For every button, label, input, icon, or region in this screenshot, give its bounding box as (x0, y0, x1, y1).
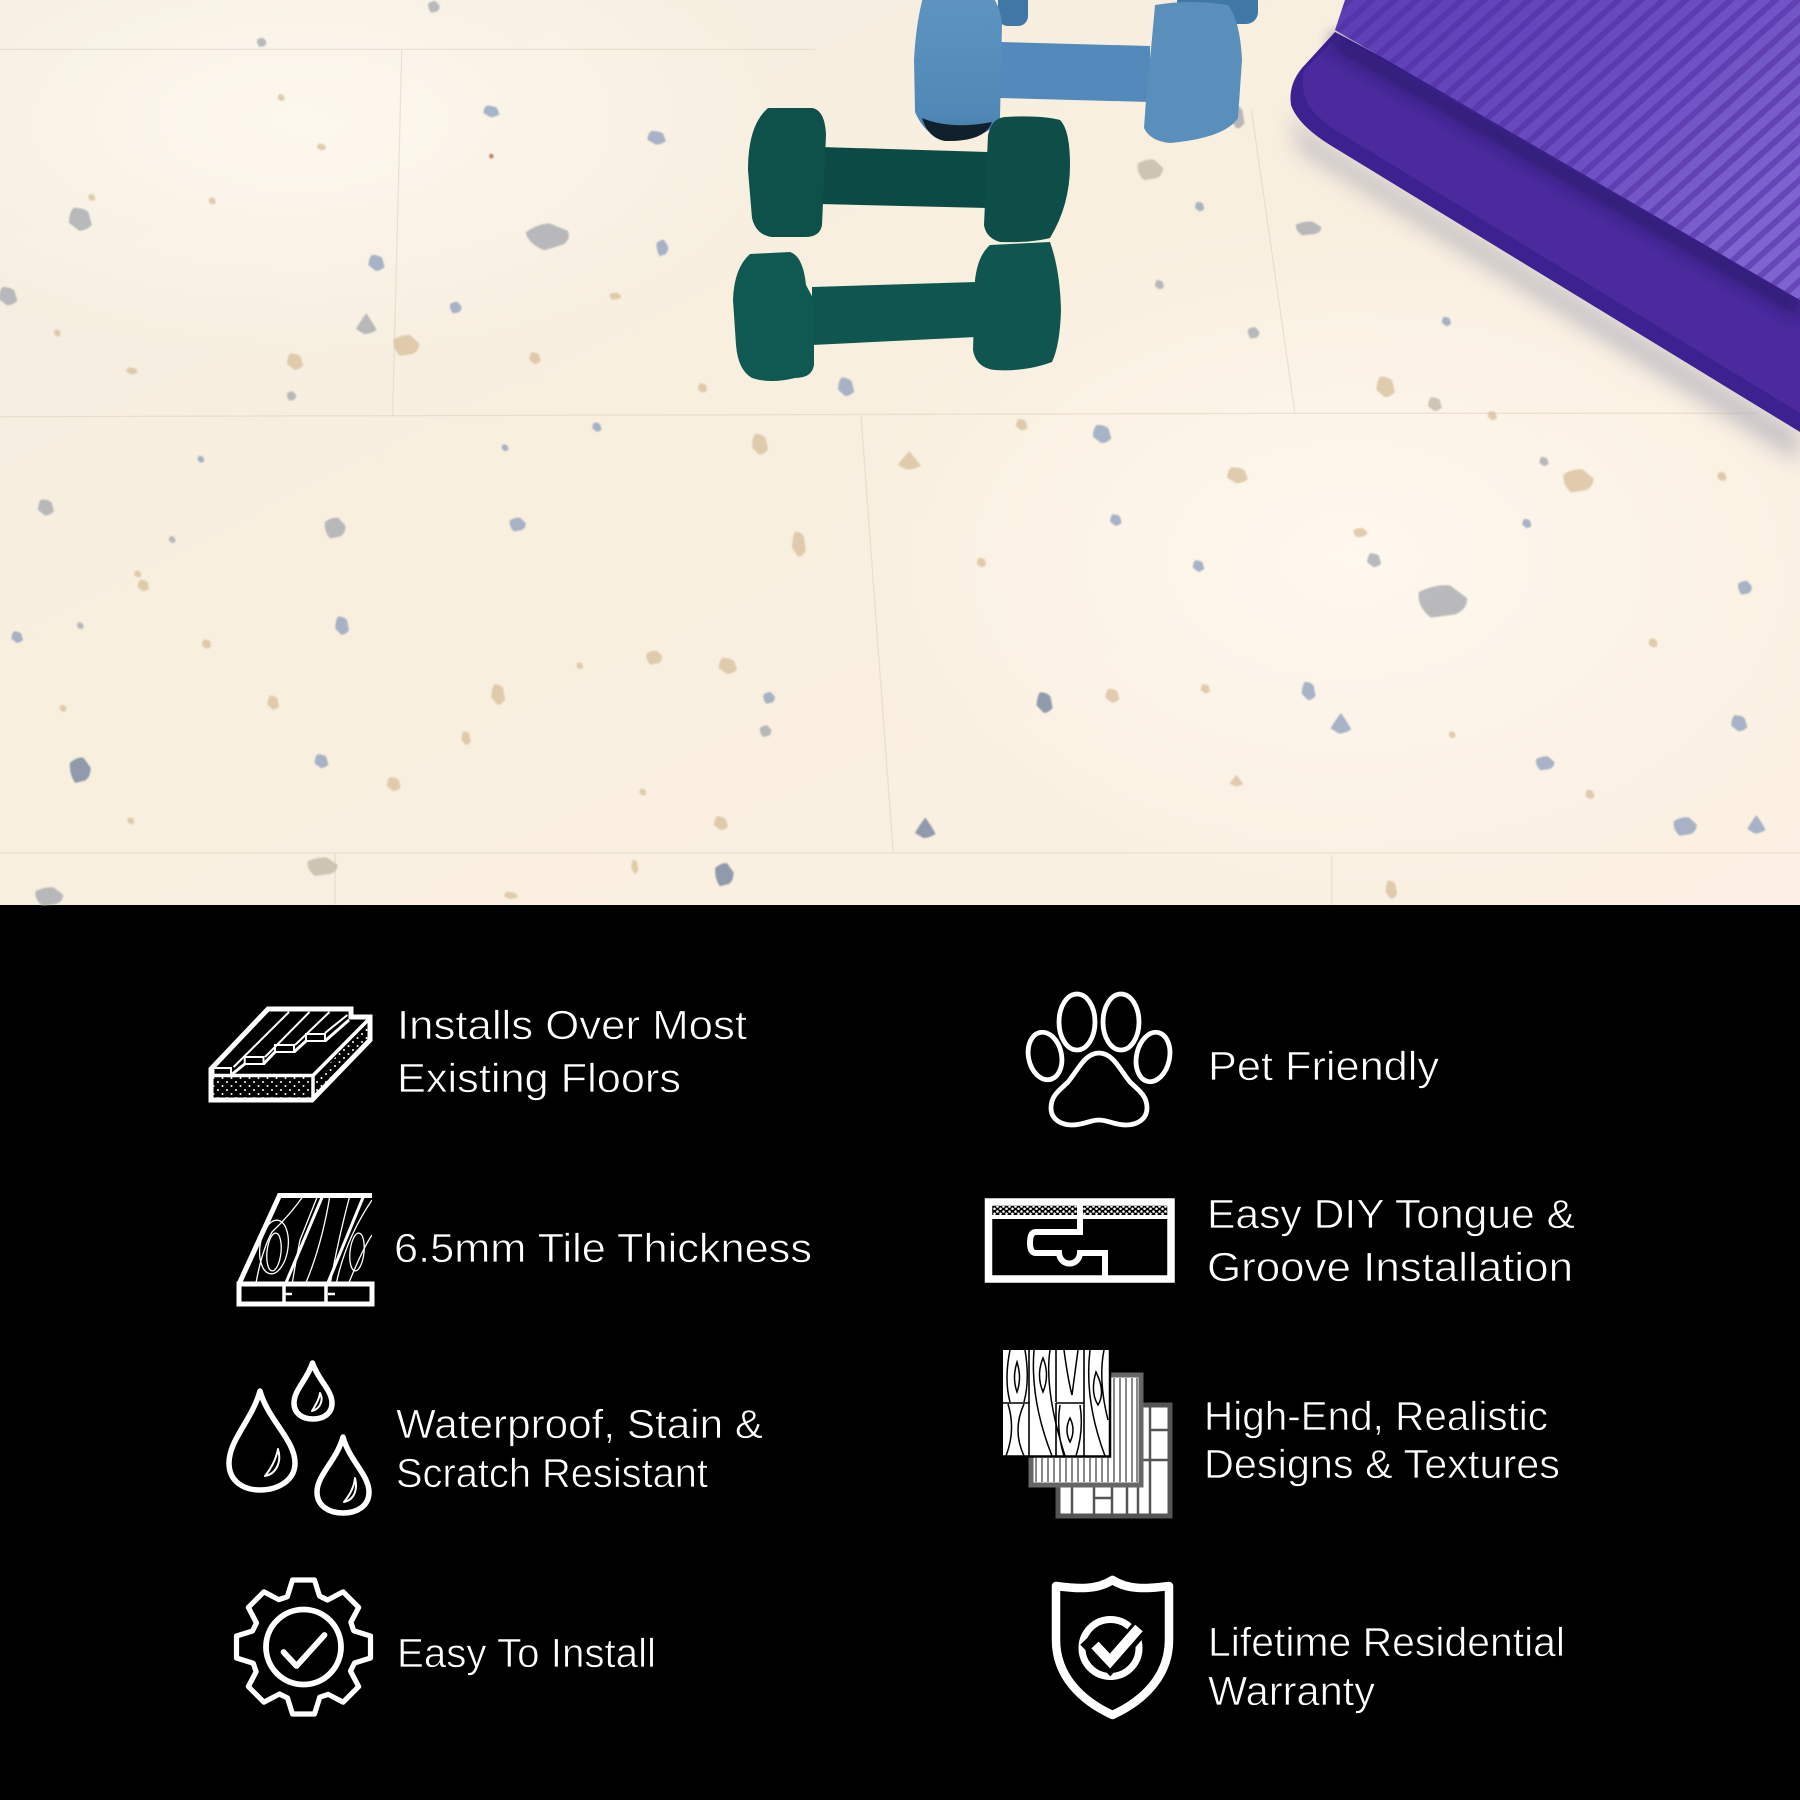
text: 6.5mm tile thickness: 6.5mm Tile Thickness (394, 1225, 812, 1271)
icon: tongue and groove joint (988, 1199, 1171, 1280)
icon: wood plank cross-section (239, 1195, 372, 1304)
text: pet friendly: Pet Friendly (1208, 1043, 1440, 1089)
icon: gear with check (236, 1580, 370, 1714)
icon: shield with check (1056, 1580, 1169, 1715)
text: easy to install: Easy To Install (397, 1630, 656, 1676)
text: installs over most existing floors: Installs Over Most (397, 1002, 748, 1048)
icon: stacked material swatches (1003, 1350, 1170, 1516)
floor surface (0, 0, 1800, 905)
text: easy DIY tongue and groove installation (1207, 1191, 1575, 1290)
icon: layered floor (209, 1009, 370, 1100)
icon: paw print (1024, 994, 1174, 1125)
tile seams and terrazzo chips (0, 1, 1800, 906)
dumbbell: blue pair behind (914, 0, 1258, 143)
feature: 6.5mm tile thickness (239, 1195, 812, 1304)
text: installs over most existing floors: Existing Floors (397, 1055, 681, 1101)
feature: waterproof, stain and scratch resistant (229, 1363, 763, 1513)
text: lifetime residential warranty (1208, 1619, 1565, 1714)
photo: terrazzo floor with dumbbells and yoga mat (0, 0, 1800, 906)
text: lifetime residential warranty: Warranty (1208, 1668, 1376, 1714)
dumbbell: green top (748, 108, 1070, 242)
text: lifetime residential warranty: Lifetime Residential (1208, 1619, 1565, 1665)
text: high-end realistic designs and textures: High-End, Realistic (1204, 1393, 1548, 1439)
text: waterproof, stain and scratch resistant: Scratch Resistant (396, 1450, 709, 1496)
text: installs over most existing floors (397, 1002, 748, 1101)
feature: lifetime residential warranty (1056, 1580, 1565, 1715)
shadow under yoga mat (1292, 112, 1800, 462)
feature: easy to install (236, 1580, 656, 1714)
text: waterproof, stain and scratch resistant: Waterproof, Stain & (396, 1401, 763, 1447)
text: easy DIY tongue and groove installation: Easy DIY Tongue & (1207, 1191, 1575, 1237)
yoga mat (1290, 0, 1800, 432)
feature: easy DIY tongue and groove installation (988, 1191, 1575, 1290)
feature: pet friendly (1024, 994, 1440, 1125)
feature: high-end realistic designs and textures (1003, 1350, 1560, 1516)
text: high-end realistic designs and textures: Designs & Textures (1204, 1441, 1560, 1487)
dumbbell: green bottom (733, 242, 1061, 381)
text: waterproof, stain and scratch resistant (396, 1401, 763, 1496)
text: high-end realistic designs and textures (1204, 1393, 1560, 1487)
text: easy DIY tongue and groove installation: Groove Installation (1207, 1244, 1573, 1290)
icon: water drops (229, 1363, 369, 1513)
background: black feature panel (0, 905, 1800, 1800)
feature: installs over most existing floors (209, 1002, 748, 1101)
